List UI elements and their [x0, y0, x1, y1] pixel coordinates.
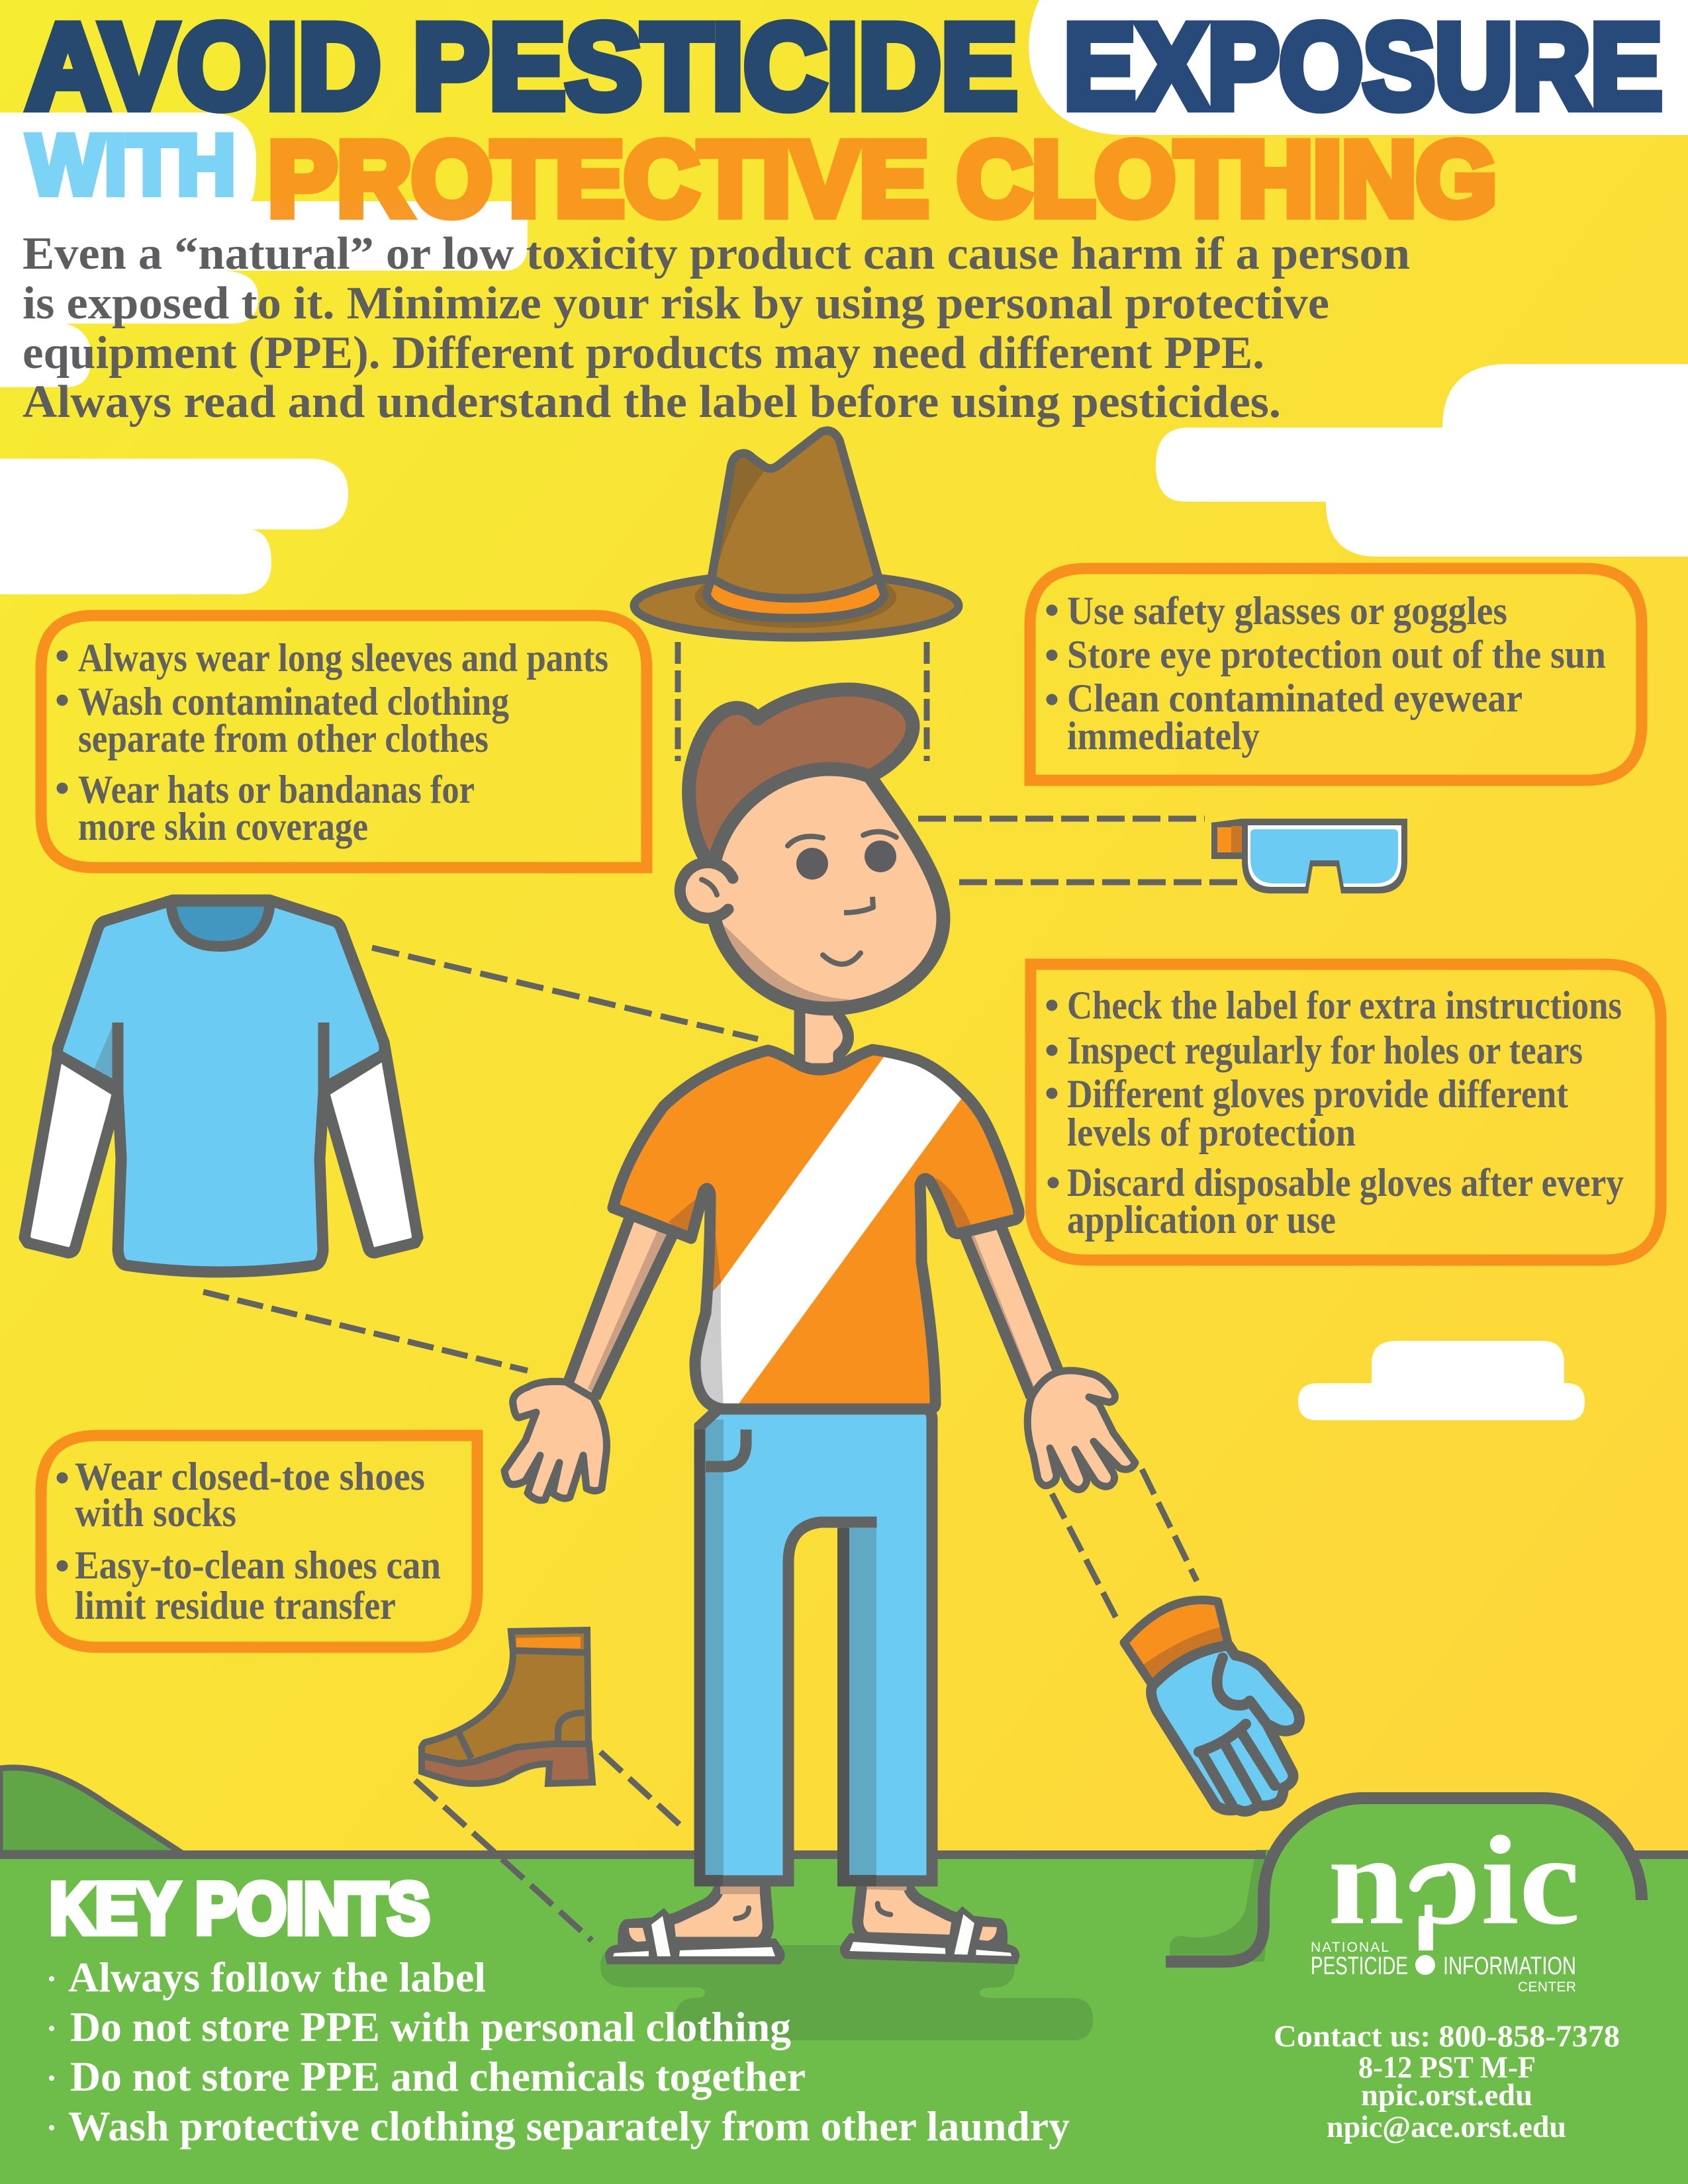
panel: eye protection callout: Clean contaminated eyewear	[1067, 676, 1523, 720]
title line 2: with protective clothing: PROTECTIVE CLOTHING	[268, 120, 1497, 238]
panel: gloves callout: Different gloves provide different	[1067, 1072, 1568, 1116]
head with hair and face	[680, 690, 943, 1009]
icon: hat	[634, 431, 959, 637]
intro paragraph: equipment (PPE). Different products may need different PPE.	[23, 328, 1264, 379]
key points list: Wash protective clothing separately from other laundry	[68, 2103, 1070, 2150]
panel: eye protection callout: immediately	[1067, 714, 1260, 758]
key points list: Always follow the label	[68, 1954, 486, 2001]
contact details: npic@ace.orst.edu	[1327, 2110, 1566, 2144]
contact details: npic.orst.edu	[1361, 2078, 1532, 2113]
dashed connector lines	[203, 642, 1238, 1940]
panel: footwear callout: limit residue transfer	[75, 1584, 396, 1627]
panel: clothing tips callout: separate from other clothes	[78, 717, 489, 760]
ear	[680, 862, 735, 919]
icon: glove	[1124, 1600, 1299, 1811]
panel: footwear callout: with socks	[75, 1491, 236, 1535]
panel: footwear callout	[41, 1435, 477, 1647]
key points list	[49, 1954, 1070, 2150]
intro paragraph: is exposed to it. Minimize your risk by using personal protective	[23, 278, 1329, 329]
panel: gloves callout: levels of protection	[1067, 1111, 1356, 1154]
panel: clothing tips callout	[41, 615, 647, 868]
chin shadow	[718, 920, 849, 1007]
panel: clothing tips callout: Wear hats or bandanas for	[78, 768, 475, 811]
panel: gloves callout	[1031, 964, 1661, 1260]
panel: clothing tips callout: more skin coverage	[78, 805, 368, 848]
feet and sandals	[605, 1878, 1022, 1964]
intro paragraph: Always read and understand the label before using pesticides.	[23, 377, 1281, 428]
panel: footwear callout: Easy-to-clean shoes can	[75, 1543, 441, 1587]
key points heading: KEY POINTS	[50, 1868, 430, 1949]
figure: person wearing PPE	[504, 690, 1135, 1964]
clouds: top and sides	[0, 0, 1688, 1420]
logo: npic	[1311, 1809, 1580, 1995]
panel: gloves callout: application or use	[1067, 1198, 1336, 1242]
logo: npic: PESTICIDE	[1311, 1952, 1408, 1980]
logo: npic: NATIONAL	[1311, 1940, 1389, 1955]
blue pants	[694, 1409, 932, 1886]
ground shadow under figure	[600, 1945, 1093, 2040]
panel: gloves callout: Discard disposable gloves after every	[1067, 1161, 1624, 1205]
orange shirt with white sash	[613, 1050, 1019, 1409]
panel: footwear callout: Wear closed-toe shoes	[75, 1455, 425, 1498]
intro paragraph: Even a “natural” or low toxicity product can cause harm if a person	[23, 228, 1410, 279]
logo: npic: npic	[1328, 1809, 1580, 1951]
neck	[800, 1006, 849, 1069]
title line 1: avoid pesticide exposure: AVOID PESTICIDE	[26, 0, 1017, 134]
hair	[689, 690, 913, 859]
icon: goggles	[1211, 819, 1407, 893]
panel: eye protection callout	[1030, 569, 1642, 780]
right arm and hand	[965, 1226, 1135, 1490]
logo: npic: INFORMATION	[1443, 1952, 1576, 1980]
logo: npic: CENTER	[1518, 1979, 1576, 1995]
panel: clothing tips callout: Always wear long sleeves and pants	[78, 636, 608, 680]
face	[715, 769, 943, 1009]
eyes	[796, 841, 896, 880]
icon: long sleeve shirt	[24, 900, 418, 1272]
panel: eye protection callout: Use safety glasses or goggles	[1067, 589, 1507, 633]
key points list: Do not store PPE and chemicals together	[70, 2053, 806, 2100]
left arm and hand	[504, 1216, 672, 1500]
contact details: Contact us: 800-858-7378	[1274, 2019, 1620, 2054]
title line 2: with protective clothing: WITH	[27, 118, 236, 212]
key points list: Do not store PPE with personal clothing	[70, 2003, 791, 2050]
contact details: 8-12 PST M-F	[1358, 2050, 1536, 2085]
panel: gloves callout: Check the label for extra instructions	[1067, 983, 1622, 1027]
panel: clothing tips callout: Wash contaminated clothing	[78, 680, 509, 723]
icon: boot	[422, 1630, 592, 1784]
ground with hill, horizon and logo hump	[0, 1768, 1688, 2184]
panel: gloves callout: Inspect regularly for holes or tears	[1067, 1028, 1583, 1072]
contact details	[1274, 2019, 1620, 2144]
brows nose mouth	[788, 832, 896, 964]
intro paragraph	[23, 228, 1410, 428]
left sandal	[605, 1883, 785, 1964]
right sandal	[840, 1878, 1022, 1964]
head outline	[715, 769, 943, 1009]
title line 1: avoid pesticide exposure	[26, 0, 1662, 134]
panel: eye protection callout: Store eye protection out of the sun	[1067, 633, 1606, 676]
